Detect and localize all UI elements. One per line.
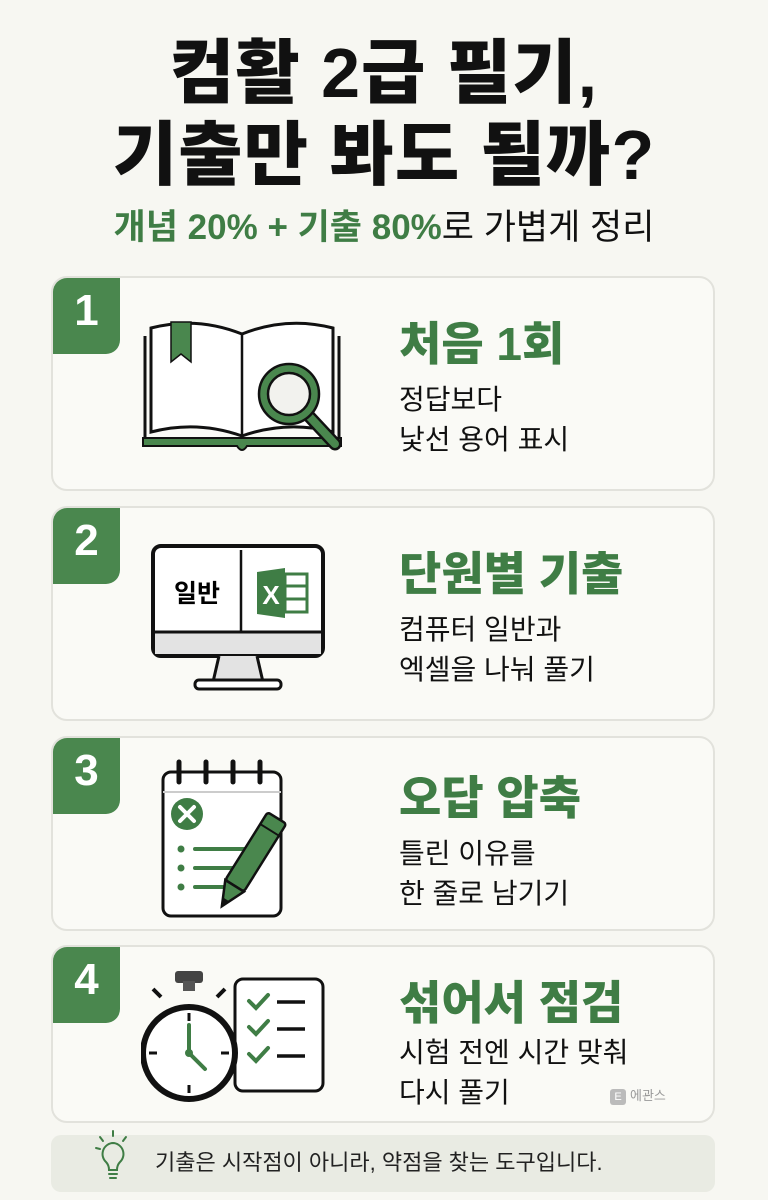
badge 4 [53,947,120,1023]
icon: lightbulb [95,1130,127,1179]
panel: step 4 [51,945,715,1123]
text: step 2: 컴퓨터 일반과 [399,614,561,645]
watermark: E [614,1091,622,1103]
badge 1 [53,278,120,354]
badge 1: 1 [74,286,99,335]
panel: step 1 [51,276,715,491]
badge 2: 2 [74,516,99,565]
text: step 2: 엑셀을 나눠 풀기 [399,654,595,685]
text: step 3: 틀린 이유를 [399,838,536,869]
title [113,34,655,194]
text: step 1 [399,318,569,455]
icon: monitor with excel: 일반 [174,580,220,608]
text: step 2: 단원별 기출 [399,548,623,600]
text: step 4 [399,977,628,1108]
text: step 4: 시험 전엔 시간 맞춰 [399,1037,628,1068]
icon: book with magnifier [142,321,342,451]
text: step 3 [399,772,581,909]
icon: stopwatch and checklist [141,971,324,1102]
badge 2 [53,508,120,584]
text: step 1: 처음 1회 [399,318,564,370]
subtitle: 개념 20% + 기출 80%로 가볍게 정리 [114,208,654,247]
badge 4: 4 [74,955,99,1004]
footer callout [51,1135,715,1192]
panel: step 3 [51,736,715,931]
title: 기출만 봐도 될까? [113,116,655,194]
text: step 1: 낯선 용어 표시 [399,424,569,455]
icon: monitor with excel: X [262,580,280,610]
badge 3 [53,738,120,814]
text: step 3: 한 줄로 남기기 [399,878,569,909]
icon: notepad with pencil [162,760,286,918]
text: step 1: 정답보다 [399,384,502,415]
text: step 4: 섞어서 점검 [399,977,623,1029]
panel: step 2 [51,506,715,721]
footer text: 기출은 시작점이 아니라, 약점을 찾는 도구입니다. [155,1150,603,1175]
watermark: 에관스 [630,1088,666,1103]
text: step 2 [399,548,623,685]
icon: monitor with excel [151,544,325,690]
text: step 4: 다시 풀기 [399,1077,510,1108]
watermark [610,1088,666,1105]
title: 컴활 2급 필기, [170,34,598,112]
text: step 3: 오답 압축 [399,772,581,824]
badge 3: 3 [74,746,99,795]
